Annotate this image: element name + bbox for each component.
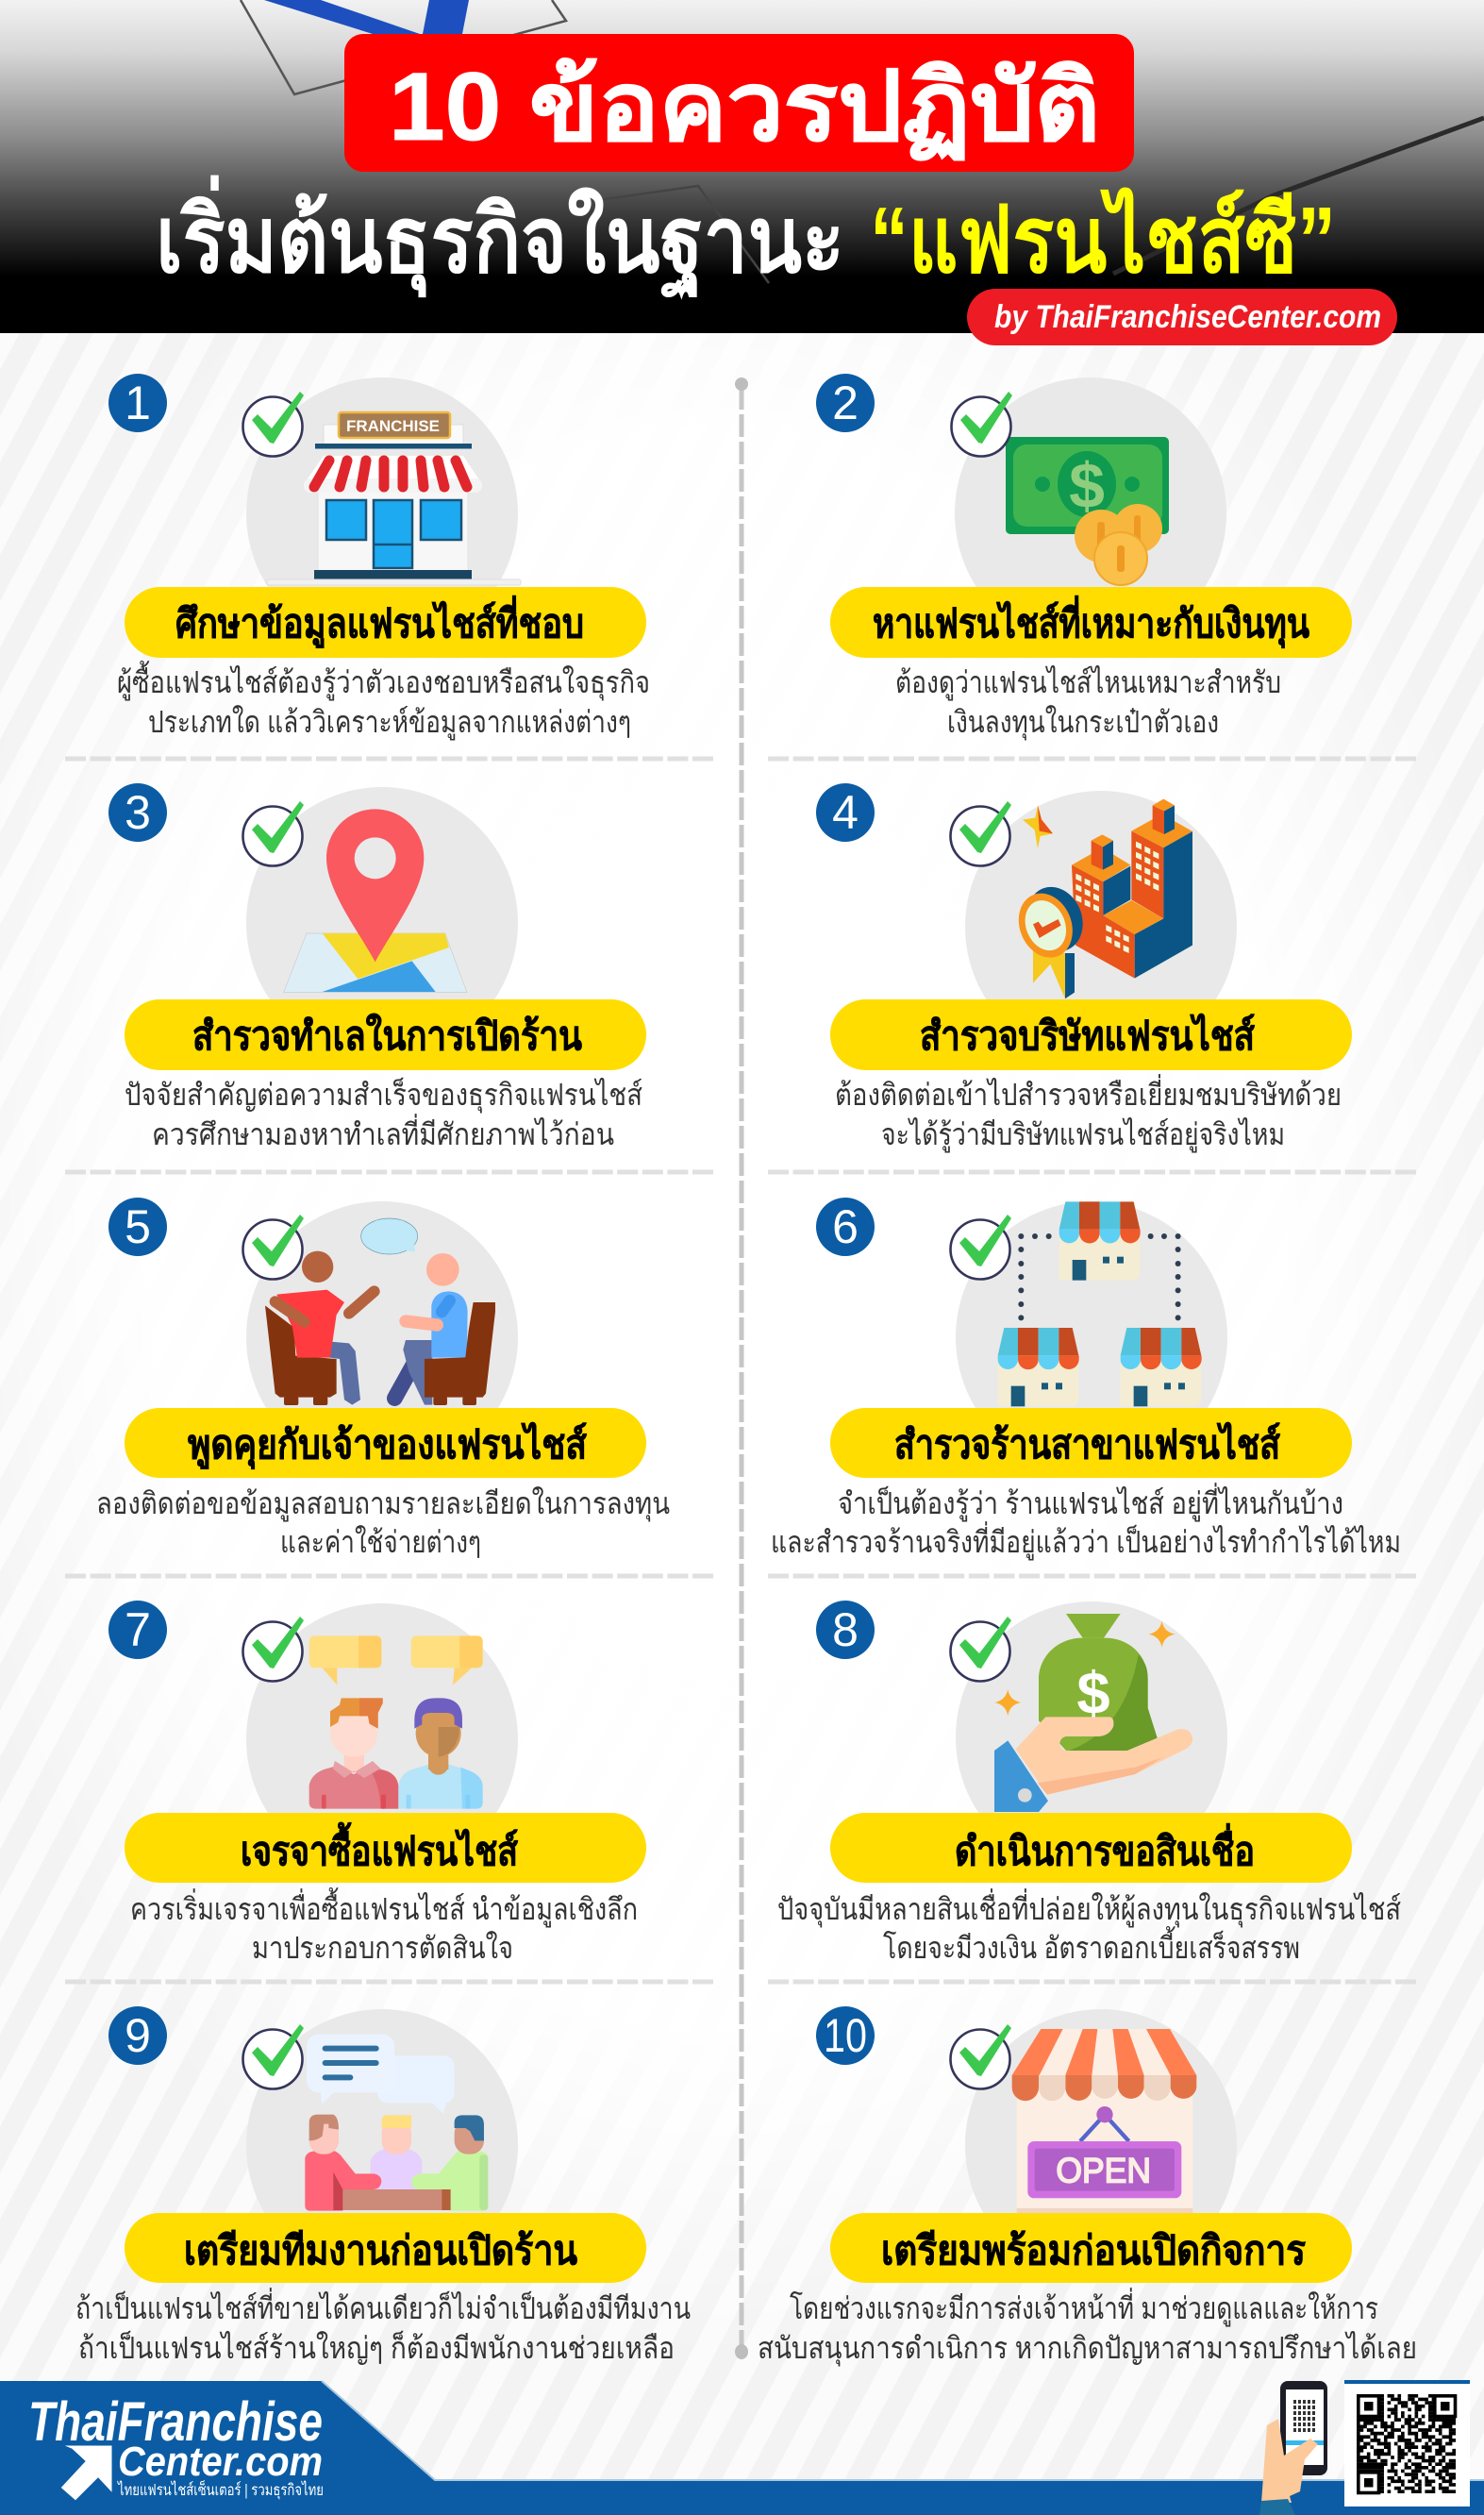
step description: จำเป็นต้องรู้ว่า ร้านแฟรนไชส์ อยู่ที่ไหนกันบ้าง — [838, 1483, 1343, 1522]
check mark — [243, 2024, 304, 2089]
icon: company buildings — [1009, 799, 1192, 998]
check mark — [243, 1215, 304, 1280]
step description: ควรศึกษามองหาทำเลที่มีศักยภาพไว้ก่อน — [152, 1114, 614, 1151]
step pill — [125, 999, 646, 1070]
header band — [0, 0, 1484, 333]
step description: ต้องติดต่อเข้าไปสำรวจหรือเยี่ยมชมบริษัทด้วย — [835, 1074, 1342, 1112]
icon: two people negotiating — [309, 1635, 483, 1809]
footer logo: ไทยแฟรนไชส์เซ็นเตอร์ | รวมธุรกิจไทย — [116, 2479, 324, 2500]
footer logo — [28, 2391, 324, 2501]
step description: ถ้าเป็นแฟรนไชส์ร้านใหญ่ๆ ก็ต้องมีพนักงานช่วยเหลือ — [78, 2330, 675, 2365]
icon: banknote and coins: $ — [1069, 450, 1105, 522]
number badge — [108, 1198, 167, 1256]
step pill — [125, 587, 646, 658]
icon: franchise shop — [267, 412, 521, 585]
step description — [117, 661, 650, 741]
panel: step 8 — [777, 1601, 1401, 1965]
step description: ถ้าเป็นแฟรนไชส์ที่ขายได้คนเดียวก็ไม่จำเป็นต้องมีทีมงาน — [75, 2288, 691, 2325]
step description — [130, 1887, 638, 1965]
icon: money bag in hand: $ — [1076, 1661, 1110, 1727]
panel: step 10 — [758, 2006, 1417, 2367]
credit pill — [967, 289, 1397, 345]
icon: banknote and coins — [1006, 437, 1169, 585]
step pill — [830, 587, 1352, 658]
step description: เงินลงทุนในกระเป๋าตัวเอง — [947, 705, 1219, 741]
number badge: 8 — [832, 1603, 859, 1656]
step pill: หาแฟรนไชส์ที่เหมาะกับเงินทุน — [873, 595, 1309, 648]
step description — [835, 1074, 1342, 1153]
check mark — [951, 801, 1011, 866]
number badge — [816, 1601, 875, 1659]
step description — [771, 1483, 1401, 1561]
number badge: 10 — [824, 2009, 867, 2062]
step pill — [830, 1408, 1352, 1478]
icon: branch shops — [998, 1201, 1202, 1406]
step pill: เตรียมพร้อมก่อนเปิดกิจการ — [881, 2228, 1306, 2272]
title badge — [344, 34, 1134, 172]
step pill: เตรียมทีมงานก่อนเปิดร้าน — [184, 2228, 577, 2272]
check mark — [951, 392, 1012, 457]
number badge — [816, 783, 875, 842]
step description — [75, 2288, 691, 2365]
number badge: 5 — [125, 1200, 151, 1253]
panel: step 5 — [96, 1198, 670, 1559]
check mark — [951, 2024, 1011, 2089]
footer logo: Center.com — [118, 2439, 323, 2485]
number badge: 3 — [125, 786, 151, 839]
step pill: ดำเนินการขอสินเชื่อ — [955, 1823, 1255, 1873]
step description — [758, 2288, 1417, 2367]
panel: step 7 — [108, 1601, 646, 1965]
step description: ปัจจัยสำคัญต่อความสำเร็จของธุรกิจแฟรนไชส์ — [125, 1077, 642, 1114]
step pill: ศึกษาข้อมูลแฟรนไชส์ที่ชอบ — [175, 595, 584, 648]
icon: map pin — [284, 809, 467, 993]
icon: open shop — [1012, 2029, 1196, 2215]
step description: จะได้รู้ว่ามีบริษัทแฟรนไชส์อยู่จริงไหม — [881, 1117, 1285, 1153]
step pill: พูดคุยกับเจ้าของแฟรนไชส์ — [188, 1421, 587, 1469]
step pill — [125, 1813, 646, 1883]
subtitle: เริ่มต้นธุรกิจในฐานะ — [156, 175, 844, 301]
number badge — [816, 1198, 875, 1256]
footer logo: ThaiFranchise — [28, 2391, 323, 2453]
step description — [895, 665, 1281, 741]
icon: money bag in hand — [994, 1614, 1192, 1812]
step pill — [830, 999, 1352, 1070]
number badge: 6 — [832, 1200, 859, 1253]
credit pill: by ThaiFranchiseCenter.com — [994, 299, 1381, 335]
step description: ต้องดูว่าแฟรนไชส์ไหนเหมาะสำหรับ — [895, 665, 1281, 701]
step pill: สำรวจทำเลในการเปิดร้าน — [192, 1013, 582, 1058]
panel: step 6 — [771, 1198, 1401, 1561]
footer band — [0, 2381, 1484, 2515]
subtitle — [156, 175, 1336, 301]
step description: และค่าใช้จ่ายต่างๆ — [280, 1525, 481, 1559]
step description — [96, 1486, 670, 1559]
panel: step 1 — [108, 374, 650, 741]
QR code — [1344, 2380, 1470, 2507]
step pill — [125, 1408, 646, 1478]
check mark — [243, 392, 304, 457]
step pill: เจรจาซื้อแฟรนไชส์ — [241, 1821, 518, 1873]
step description: โดยจะมีวงเงิน อัตราดอกเบี้ยเสร็จสรรพ — [883, 1926, 1300, 1965]
icon: franchise shop: FRANCHISE — [346, 417, 440, 435]
step description: มาประกอบการตัดสินใจ — [252, 1931, 513, 1965]
number badge: 7 — [125, 1603, 151, 1656]
subtitle: “แฟรนไชส์ซี” — [870, 187, 1336, 292]
icon: two people talking — [265, 1218, 495, 1405]
panel: step 3 — [108, 783, 646, 1151]
step pill — [125, 2213, 646, 2283]
number badge: 9 — [125, 2009, 151, 2062]
step description: ควรเริ่มเจรจาเพื่อซื้อแฟรนไชส์ นำข้อมูลเชิงลึก — [130, 1887, 638, 1928]
step pill: สำรวจบริษัทแฟรนไชส์ — [920, 1013, 1255, 1058]
number badge: 2 — [832, 377, 859, 429]
number badge: 1 — [125, 377, 151, 429]
phone in hand — [1259, 2381, 1327, 2515]
number badge — [108, 374, 167, 432]
check mark — [951, 1617, 1011, 1682]
step pill — [830, 2213, 1352, 2283]
check mark — [243, 1617, 304, 1682]
panel: step 2 — [816, 374, 1352, 741]
icon: team meeting — [305, 2035, 488, 2211]
panel: step 9 — [75, 2006, 691, 2365]
step pill — [830, 1813, 1352, 1883]
number badge — [108, 783, 167, 842]
title badge: 10 ข้อควรปฏิบัติ — [389, 53, 1100, 161]
step description — [777, 1888, 1401, 1965]
step description: ผู้ซื้อแฟรนไชส์ต้องรู้ว่าตัวเองชอบหรือสนใจธุรกิจ — [117, 661, 650, 701]
number badge — [108, 1601, 167, 1659]
number badge: 4 — [832, 786, 859, 839]
step pill: สำรวจร้านสาขาแฟรนไชส์ — [894, 1421, 1280, 1467]
panel: step 4 — [816, 783, 1352, 1153]
number badge — [108, 2006, 167, 2065]
step description: ลองติดต่อขอข้อมูลสอบถามรายละเอียดในการลงทุน — [96, 1486, 670, 1522]
step description: ประเภทใด แล้ววิเคราะห์ข้อมูลจากแหล่งต่างๆ — [148, 705, 631, 741]
check mark — [243, 801, 304, 866]
number badge — [816, 374, 875, 432]
icon: open shop: OPEN — [1056, 2151, 1151, 2190]
check mark — [951, 1215, 1011, 1280]
column divider — [735, 377, 748, 2359]
step description — [125, 1077, 642, 1151]
